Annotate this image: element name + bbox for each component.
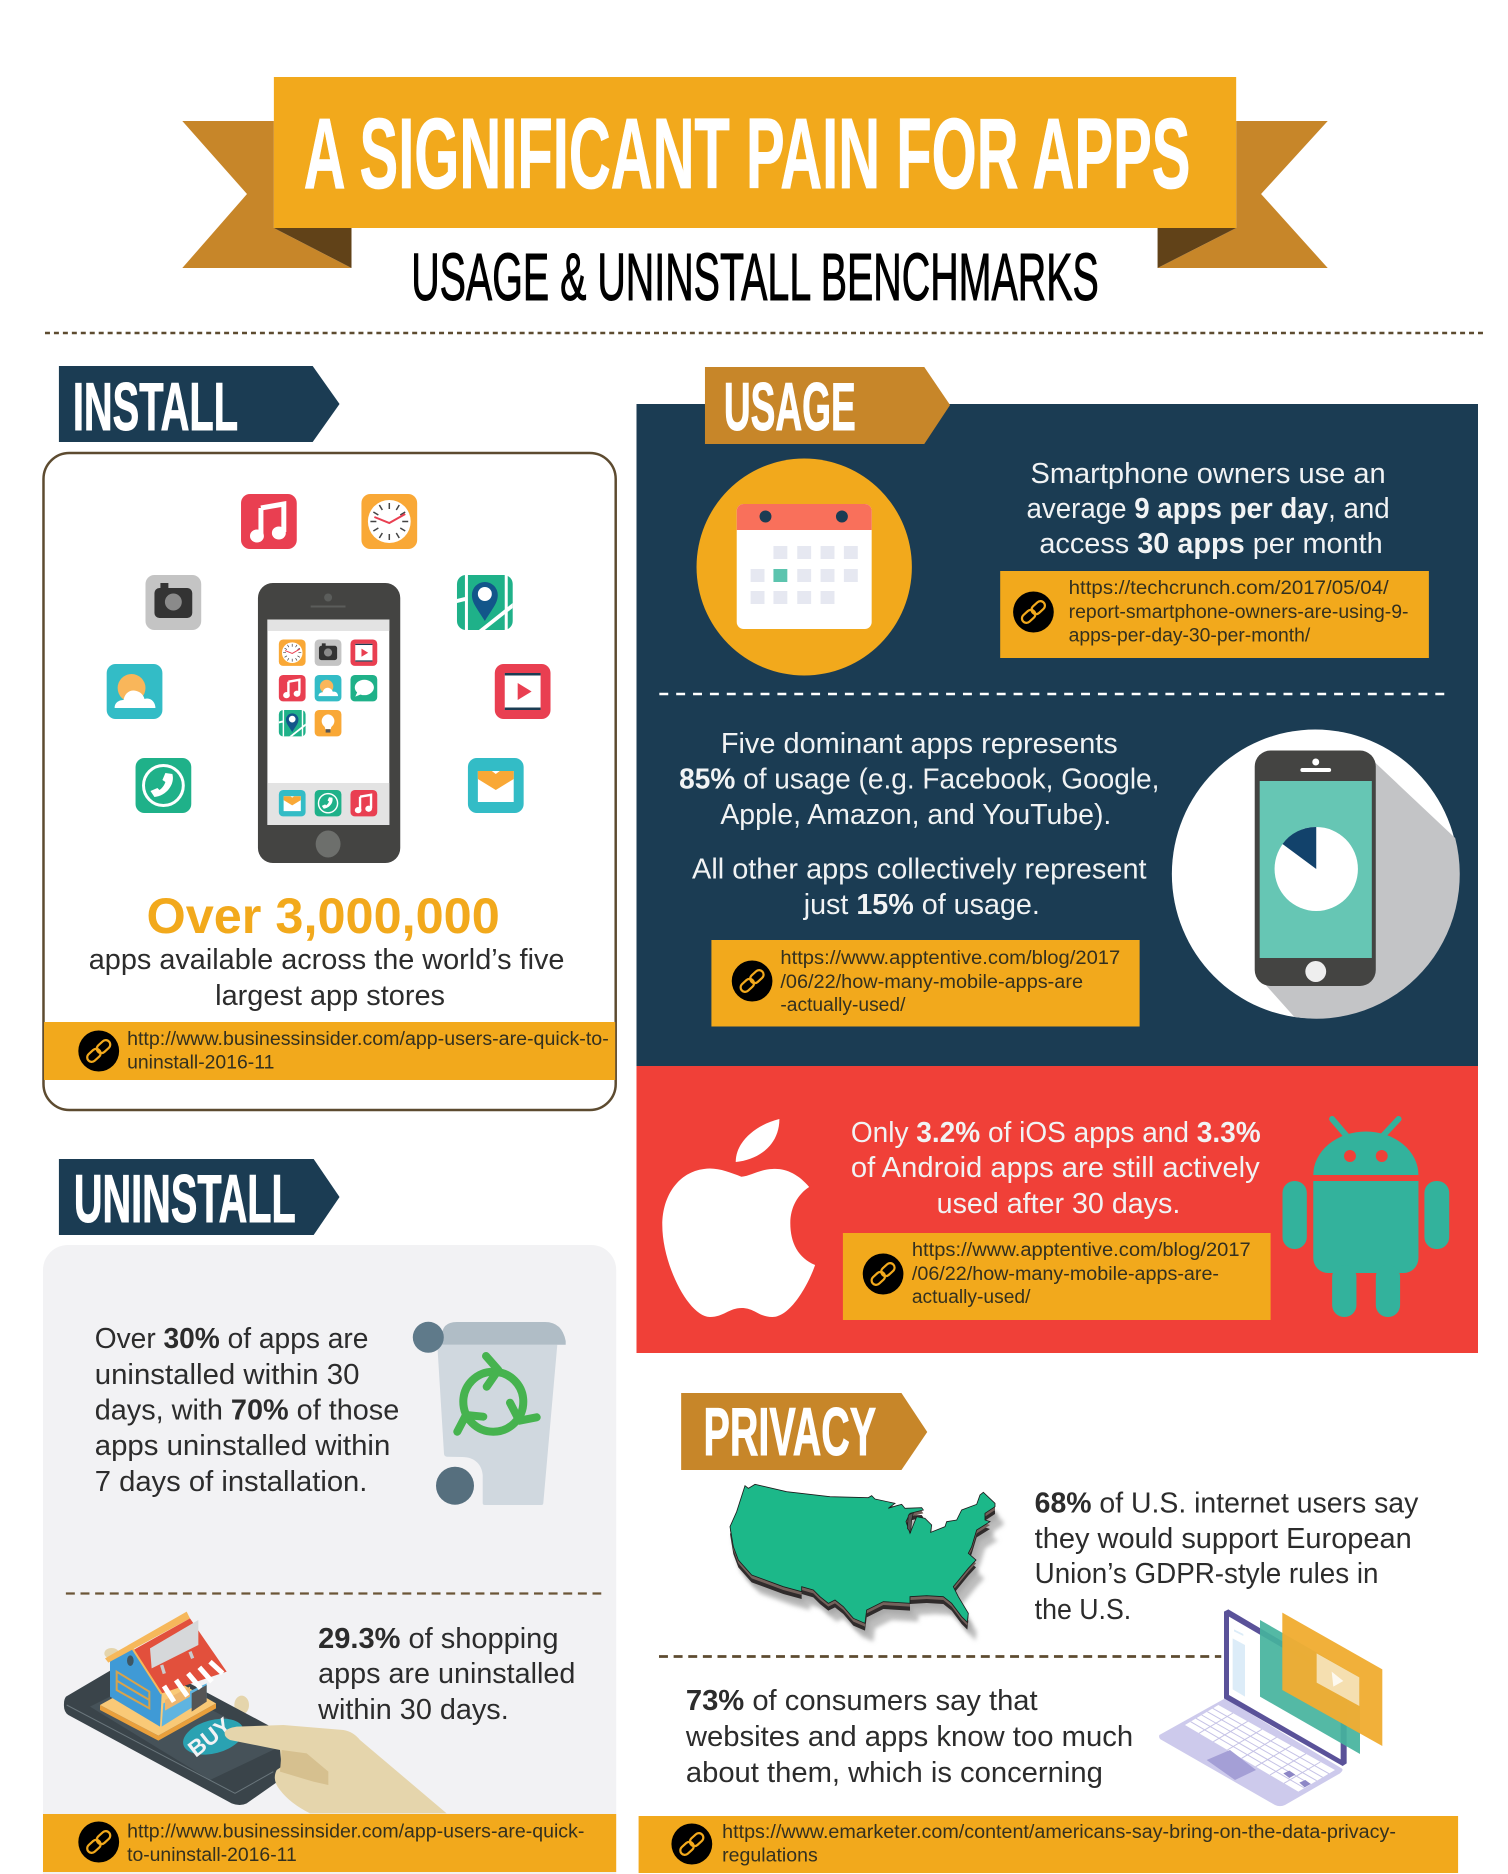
text: retention stats: of Android apps are still actively <box>851 1152 1260 1184</box>
source link: apptentive: https://www.apptentive.com/blog/2017 <box>780 947 1120 969</box>
icon: music <box>241 494 297 549</box>
text: five dominant apps: 85% of usage (e.g. Facebook, Google, <box>679 763 1159 796</box>
text: 29.3% <box>317 1623 575 1726</box>
section badge: usage: USAGE <box>724 370 856 445</box>
text: 29.3%: within 30 days. <box>317 1694 509 1726</box>
stat: over 3,000,000: Over 3,000,000 <box>146 888 500 944</box>
title ribbon <box>182 77 1328 268</box>
text: over 30% <box>95 1323 399 1498</box>
text: 73% of consumers <box>685 1685 1133 1789</box>
text: 68% of internet users: they would support European <box>1035 1523 1412 1555</box>
source link: apptentive: actually-used/ <box>912 1286 1031 1308</box>
icon: apple logo <box>662 1119 815 1317</box>
source link: apptentive <box>711 940 1140 1026</box>
text: 68% of internet users: Union’s GDPR-style rules in <box>1035 1558 1378 1590</box>
text: over 30%: days, with 70% of those <box>95 1394 399 1427</box>
icon: call <box>136 758 191 813</box>
icon: recycle bin <box>413 1322 566 1505</box>
text: over 30%: uninstalled within 30 <box>95 1359 359 1391</box>
text: over 30%: 7 days of installation. <box>95 1466 367 1498</box>
text: 73% of consumers: websites and apps know too much <box>685 1721 1133 1753</box>
text: 9 apps per day: Smartphone owners use an <box>1030 458 1386 490</box>
source link: apptentive: /06/22/how-many-mobile-apps-are- <box>912 1263 1219 1285</box>
text: 9 apps per day: average 9 apps per day, and <box>1026 493 1390 525</box>
section badge: uninstall <box>59 1159 340 1237</box>
icon: camera <box>145 575 201 630</box>
text: retention stats: used after 30 days. <box>937 1188 1180 1220</box>
text: 73% of consumers: 73% of consumers say that <box>686 1685 1038 1717</box>
text: apps available: largest app stores <box>215 980 445 1012</box>
source link: uninstall: to-uninstall-2016-11 <box>127 1844 297 1866</box>
text: 9 apps per day <box>1026 458 1390 560</box>
icon: clock <box>361 494 417 549</box>
map: united states <box>730 1484 1003 1642</box>
source link: emarketer: regulations <box>722 1844 818 1867</box>
source link: emarketer <box>639 1816 1458 1873</box>
illustration: phone with apps <box>258 583 400 863</box>
source link: apptentive: -actually-used/ <box>780 994 906 1016</box>
icon: mail <box>468 758 524 813</box>
text: 29.3%: apps are uninstalled <box>318 1658 575 1690</box>
source link: emarketer: https://www.emarketer.com/content/americans-say-bring-on-the-data-privacy- <box>722 1821 1396 1843</box>
source link: install: http://www.businessinsider.com/app-users-are-quick-to- <box>127 1028 609 1050</box>
source link: uninstall: http://www.businessinsider.com/app-users-are-quick- <box>127 1820 584 1843</box>
icon: android robot <box>1283 1119 1449 1317</box>
panel: retention <box>636 1066 1478 1353</box>
icon: map <box>457 575 513 630</box>
illustration: laptop with windows <box>1159 1609 1382 1806</box>
text: over 30%: Over 30% of apps are <box>95 1323 368 1355</box>
source link: apptentive <box>843 1233 1271 1320</box>
text: 68% of internet users <box>1035 1487 1419 1626</box>
section badge: install: INSTALL <box>73 370 238 445</box>
panel: uninstall <box>43 1245 616 1874</box>
text: 68% of internet users: the U.S. <box>1035 1594 1131 1626</box>
source link: uninstall <box>43 1814 616 1872</box>
text: retention stats: Only 3.2% of iOS apps and 3.3% <box>851 1117 1261 1149</box>
text: apps available: apps available across the world’s five <box>89 944 564 976</box>
section badge: privacy: PRIVACY <box>703 1395 876 1470</box>
source link: techcrunch <box>1000 571 1429 658</box>
panel: usage <box>636 367 1478 1066</box>
text: five dominant apps <box>679 728 1159 921</box>
text: five dominant apps: Apple, Amazon, and YouTube). <box>720 799 1111 831</box>
source link: techcrunch: apps-per-day-30-per-month/ <box>1069 624 1311 647</box>
source link: install <box>44 1022 615 1080</box>
text: 9 apps per day: access 30 apps per month <box>1039 528 1383 560</box>
panel: install <box>43 453 616 1110</box>
text: five dominant apps: All other apps collectively represent <box>692 853 1147 886</box>
section badge: uninstall: UNINSTALL <box>74 1162 296 1237</box>
icon: phone with pie chart <box>1172 730 1460 1019</box>
text: five dominant apps: Five dominant apps represents <box>721 728 1118 760</box>
source link: install: uninstall-2016-11 <box>127 1051 274 1074</box>
text: apps available <box>89 944 564 1012</box>
source link: apptentive: /06/22/how-many-mobile-apps-are <box>780 971 1083 993</box>
text: 73% of consumers: about them, which is concerning <box>686 1757 1103 1789</box>
section badge: privacy <box>681 1393 927 1470</box>
text: five dominant apps: just 15% of usage. <box>803 889 1040 921</box>
icon: weather <box>107 664 162 719</box>
source link: techcrunch: https://techcrunch.com/2017/05/04/ <box>1069 577 1389 599</box>
icon: video <box>495 664 551 719</box>
icon: calendar <box>697 458 912 676</box>
illustration: shop on phone with hand: BUY <box>183 1712 236 1762</box>
source link: apptentive: https://www.apptentive.com/blog/2017 <box>912 1239 1251 1261</box>
source link: techcrunch: report-smartphone-owners-are-using-9- <box>1069 601 1409 623</box>
text: 68% of internet users: 68% of U.S. internet users say <box>1035 1487 1419 1520</box>
illustration: shop on phone with hand <box>64 1612 447 1813</box>
text: retention stats <box>851 1117 1261 1220</box>
text: over 30%: apps uninstalled within <box>95 1430 390 1462</box>
text: 29.3%: 29.3% of shopping <box>318 1623 558 1655</box>
